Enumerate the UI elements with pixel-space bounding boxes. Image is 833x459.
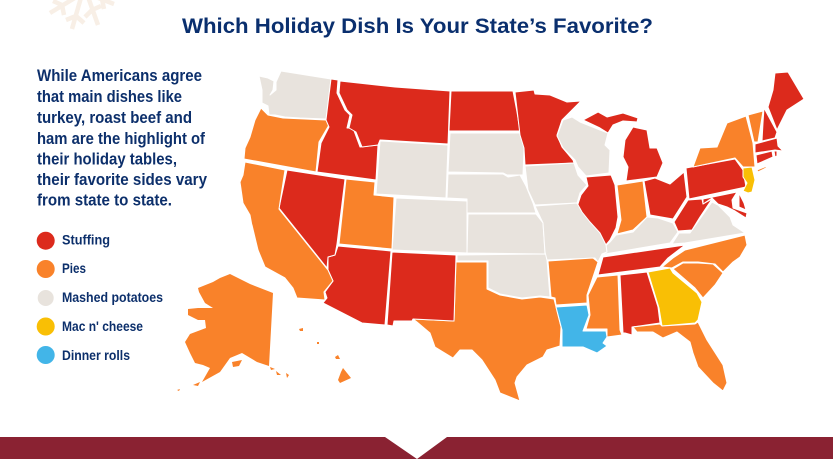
map of US states by favorite side dish [177, 71, 804, 401]
legend item: dinner rolls: Dinner rolls [62, 347, 130, 363]
icon: snowflake decoration [50, 0, 114, 29]
intro text block: ham are the highlight of [37, 130, 205, 148]
footer banner with notch [0, 437, 833, 459]
intro text block [37, 67, 208, 210]
legend item: mashed potatoes: Mashed potatoes [62, 289, 163, 305]
intro text block: their favorite sides vary [37, 171, 208, 189]
intro text block: that main dishes like [37, 88, 182, 106]
legend item: stuffing: Stuffing [62, 232, 110, 248]
legend [37, 232, 163, 364]
title: Which Holiday Dish Is Your State’s Favorite? [182, 14, 653, 38]
intro text block: their holiday tables, [37, 150, 177, 168]
intro text block: While Americans agree [37, 67, 202, 85]
Alaska [185, 274, 273, 382]
Hawaii [299, 328, 351, 383]
intro text block: from state to state. [37, 192, 172, 210]
legend item: mac n' cheese: Mac n' cheese [62, 318, 143, 334]
legend item: pies: Pies [62, 260, 86, 276]
Alaska islands [177, 360, 289, 391]
intro text block: turkey, roast beef and [37, 109, 192, 127]
